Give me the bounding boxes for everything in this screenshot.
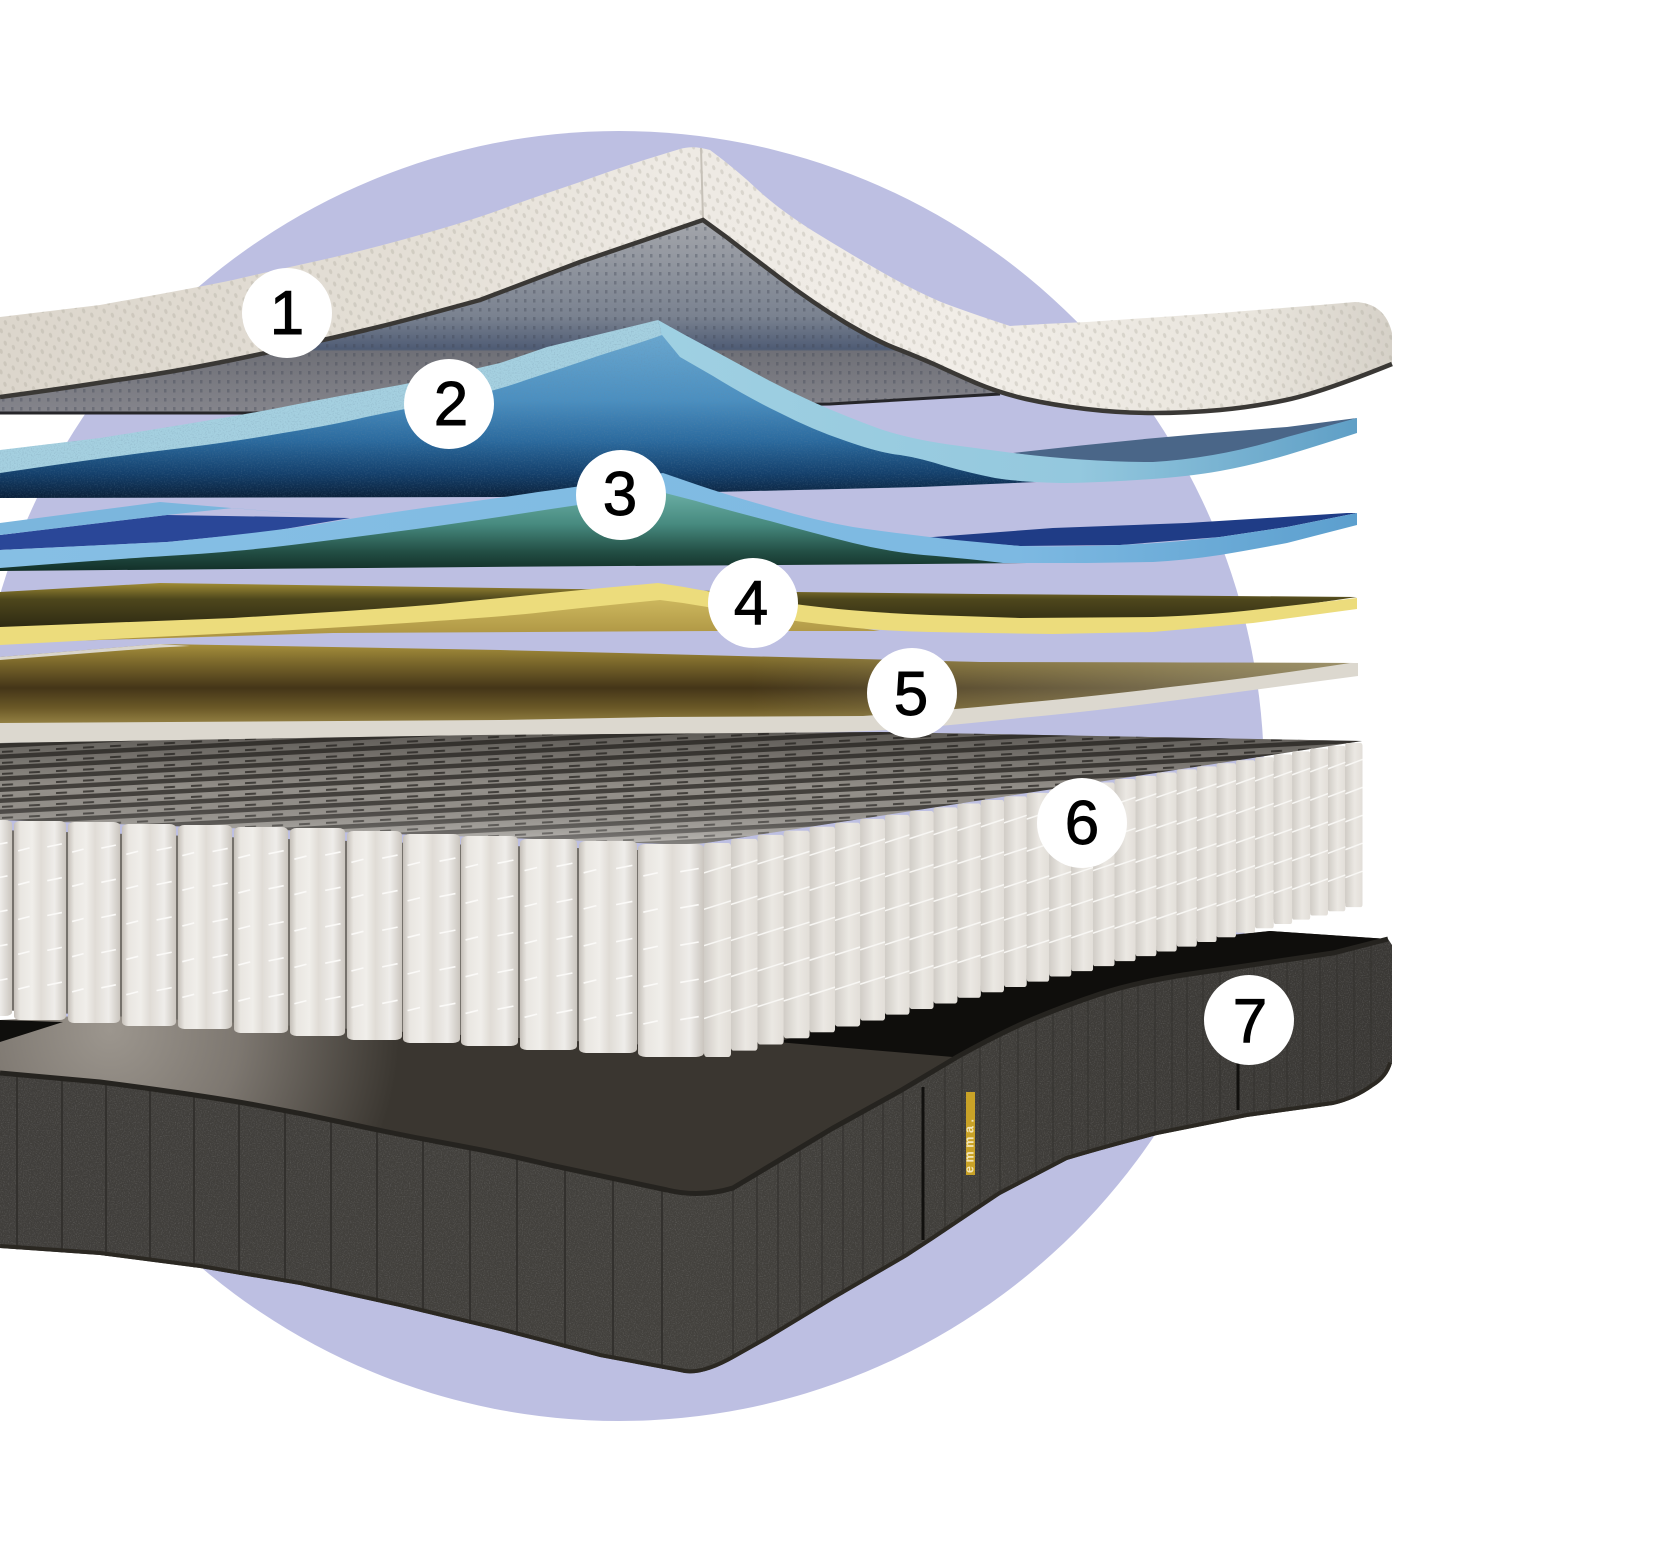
blue foam far corner <box>1013 418 1357 465</box>
badge 6: 6 <box>1065 789 1099 858</box>
light blue foam edge <box>0 473 1357 568</box>
spring tops <box>0 732 1362 845</box>
badge 4 <box>708 558 798 648</box>
right side coils <box>704 743 1363 1057</box>
badge 3 <box>576 450 666 540</box>
layer 7: dark base <box>0 900 1392 1390</box>
spring backing <box>0 748 1360 1048</box>
emma label: emma. <box>962 1115 976 1173</box>
far left foam corner <box>0 515 350 550</box>
base top surface <box>0 931 1388 1194</box>
badge 1: 1 <box>270 279 304 348</box>
blue foam right edge <box>658 320 1357 483</box>
bottom edge shadow <box>0 1063 1392 1373</box>
base side fabric <box>0 939 1392 1373</box>
blue foam left edge <box>0 320 662 473</box>
black inner tray <box>777 931 1388 1057</box>
layer 3: blue-green foam <box>0 473 1357 571</box>
yellow edge <box>0 583 1357 645</box>
emma label <box>962 1092 976 1175</box>
mattress layers illustration <box>0 131 1393 1421</box>
badge 6 <box>1037 778 1127 868</box>
side ribs <box>0 946 1392 1374</box>
badge 4: 4 <box>734 569 768 638</box>
topper quilted fabric <box>0 147 1392 413</box>
olive felt <box>0 644 1357 724</box>
topper underside <box>0 220 1000 413</box>
lavender background circle <box>0 131 1264 1421</box>
badge 2 <box>404 359 494 449</box>
green underside <box>0 488 1027 571</box>
base piping <box>0 939 1388 1194</box>
layer 2: blue foam <box>0 320 1357 498</box>
badge 3: 3 <box>603 460 637 529</box>
yellow underside <box>0 596 880 643</box>
layer 1: cover topper <box>0 147 1392 413</box>
layer 4: yellow foam <box>0 583 1357 645</box>
far right foam corner <box>920 513 1357 546</box>
layer 5: felt pad <box>0 644 1358 743</box>
badge 2: 2 <box>434 370 468 439</box>
badge 7: 7 <box>1233 987 1267 1056</box>
badge 1 <box>242 268 332 358</box>
badge 5: 5 <box>894 660 928 729</box>
badge 7 <box>1204 975 1294 1065</box>
olive back <box>0 583 1357 629</box>
layer 6: pocket springs <box>0 732 1363 1057</box>
blue foam underside <box>0 330 1060 498</box>
badge 5 <box>867 648 957 738</box>
front coils <box>0 820 704 1057</box>
white latex edge <box>0 663 1358 743</box>
